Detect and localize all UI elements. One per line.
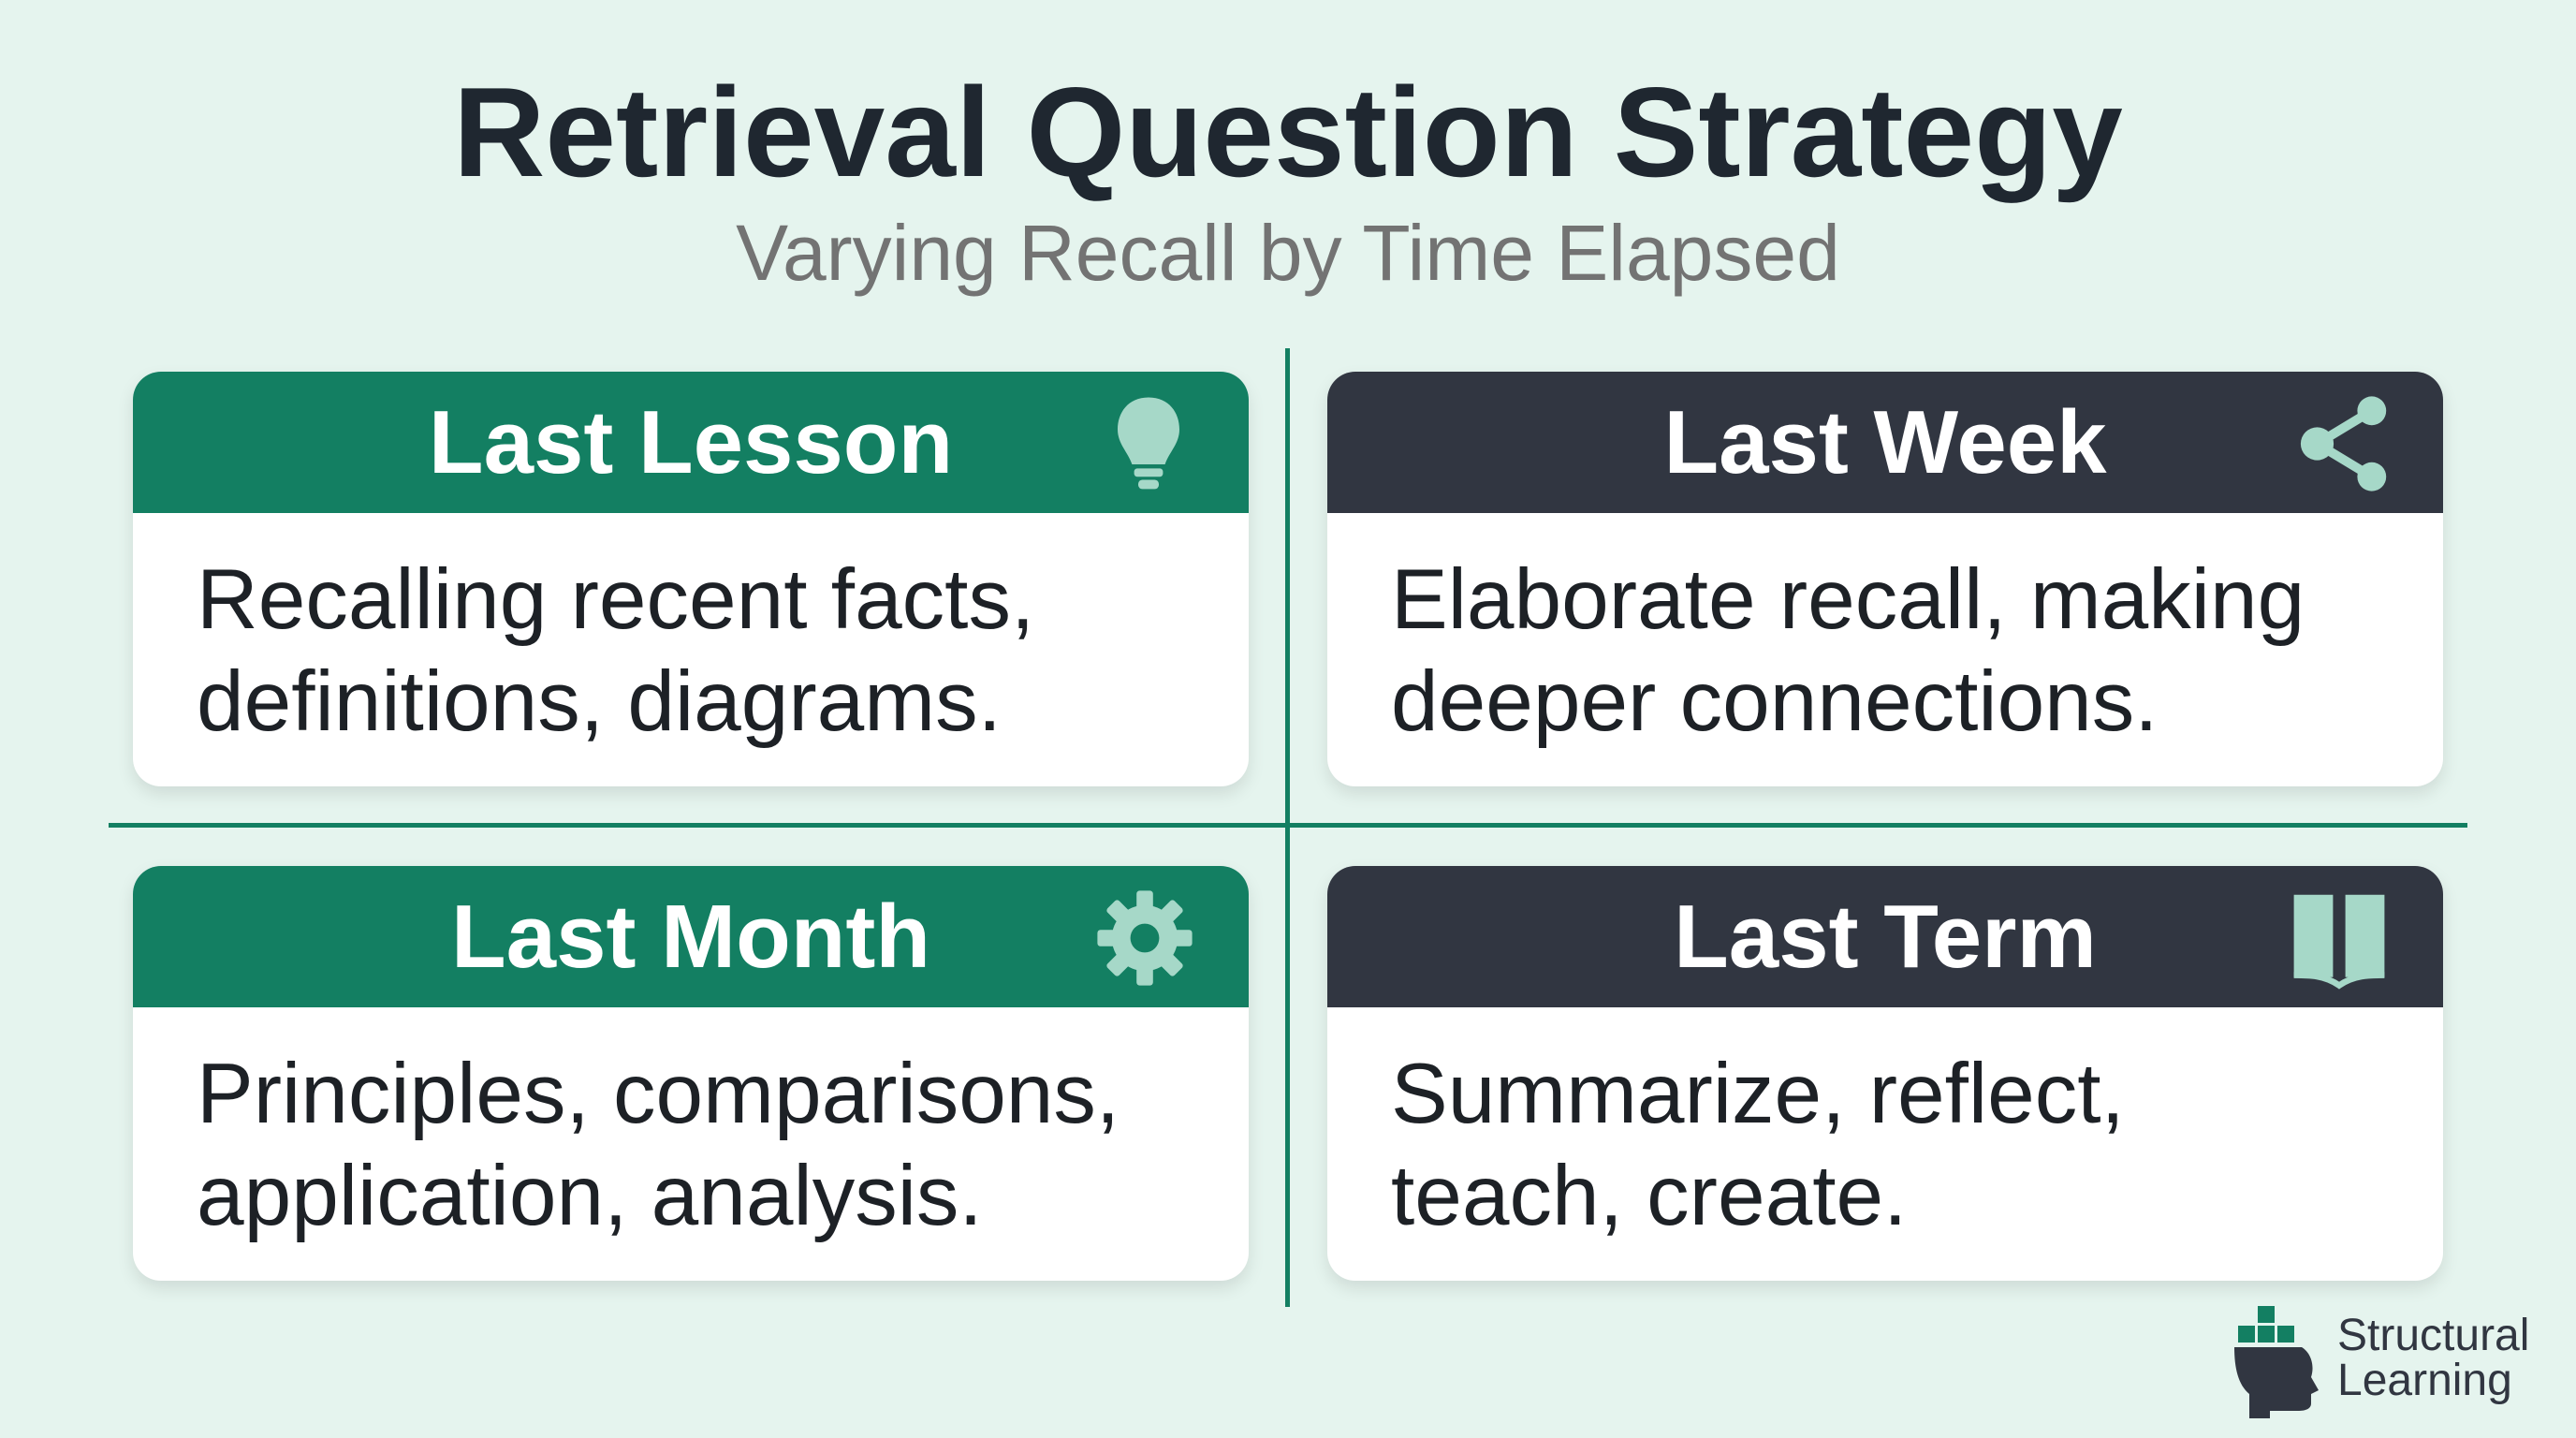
header: last lesson (133, 372, 1249, 513)
vertical divider (1285, 348, 1290, 1307)
text: last term: Summarize, reflect, (1391, 1047, 2125, 1141)
header: last term (1327, 866, 2443, 1007)
text: last lesson: Recalling recent facts, (197, 552, 1034, 647)
text: last term: teach, create. (1391, 1149, 1907, 1243)
text: last lesson: definitions, diagrams. (197, 654, 1002, 749)
text: last week (1391, 552, 2305, 749)
logo text: Structural (2337, 1311, 2529, 1360)
icon: lightbulb (1118, 397, 1179, 489)
icon: share (2301, 396, 2387, 492)
horizontal divider (109, 823, 2467, 828)
title: Retrieval Question Strategy (453, 61, 2123, 203)
panel: last month (133, 866, 1249, 1281)
text: last lesson (197, 552, 1034, 749)
panel: last week (1327, 372, 2443, 786)
header: last lesson: Last Lesson (429, 392, 953, 492)
panel: last lesson (133, 372, 1249, 786)
icon: book (2293, 895, 2385, 989)
header: last week (1327, 372, 2443, 513)
header: last month: Last Month (451, 887, 930, 987)
icon: head with blocks (2234, 1306, 2319, 1418)
logo text (2337, 1311, 2529, 1405)
header: last week: Last Week (1663, 392, 2107, 492)
icon: gear (1097, 890, 1193, 986)
text: last week: Elaborate recall, making (1391, 552, 2305, 647)
text: last month: application, analysis. (197, 1149, 983, 1243)
subtitle: Varying Recall by Time Elapsed (736, 209, 1840, 297)
text: last month (197, 1047, 1120, 1243)
header: last term: Last Term (1674, 887, 2097, 987)
text: last term (1391, 1047, 2125, 1243)
logo text: Learning (2337, 1356, 2512, 1405)
logo (2234, 1306, 2529, 1418)
text: last month: Principles, comparisons, (197, 1047, 1120, 1141)
text: last week: deeper connections. (1391, 654, 2159, 749)
header: last month (133, 866, 1249, 1007)
panel: last term (1327, 866, 2443, 1281)
